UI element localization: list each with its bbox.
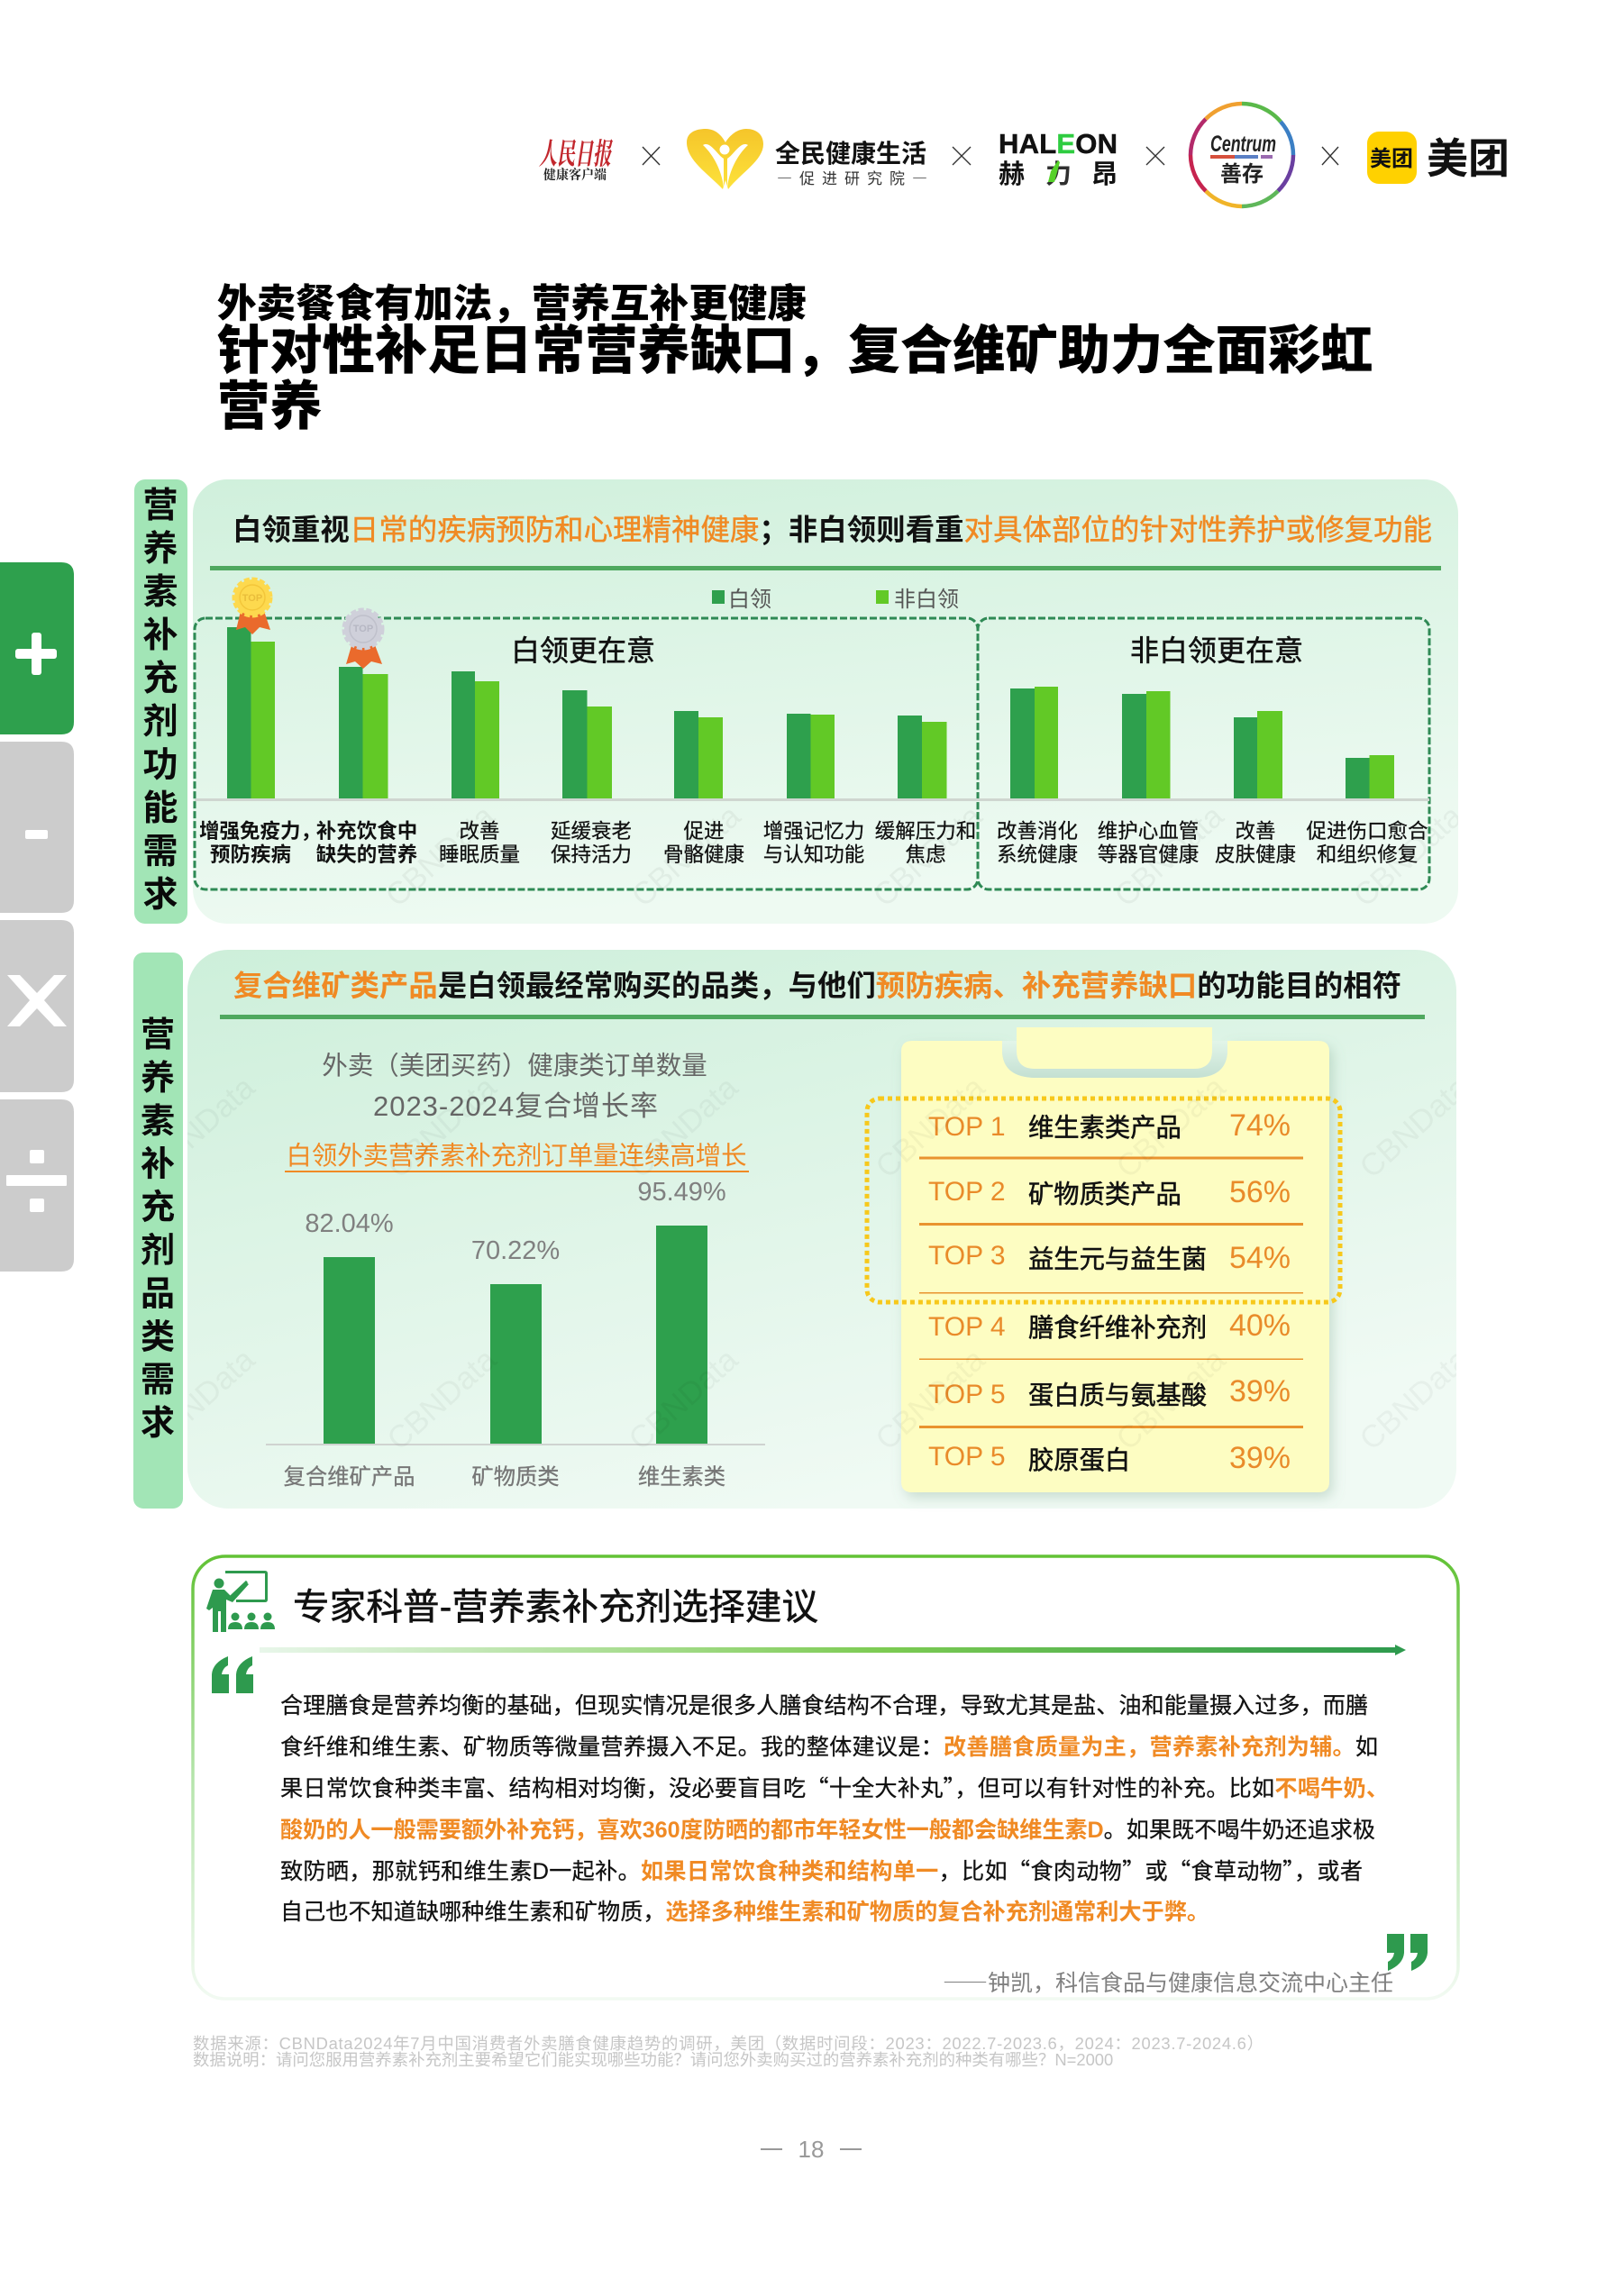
panel: function demand — [193, 479, 1470, 924]
category labels: 改善 — [1235, 816, 1276, 844]
side label: 营养素补充剂品类需求: 补 — [141, 1136, 175, 1186]
category labels: 保持活力 — [551, 839, 632, 868]
category labels: 骨骼健康 — [663, 839, 744, 868]
category labels: 增强记忆力 — [763, 816, 864, 844]
side label: 营养素补充剂功能需求: 能 — [142, 780, 178, 831]
side label: 营养素补充剂品类需求: 类 — [141, 1308, 175, 1358]
row: TOP 5 protein: 蛋白质与氨基酸 — [1028, 1375, 1207, 1412]
chart title: 2023-2024复合增长率 — [373, 1090, 658, 1122]
watermarks: CBNData — [1109, 1070, 1233, 1185]
chart title — [322, 1045, 707, 1122]
logo: HALEON 赫力昂 — [999, 128, 1118, 191]
category labels: 促进 — [683, 816, 725, 844]
logo: HALEON 赫力昂: 力 — [1045, 153, 1072, 191]
row: TOP 5 protein — [928, 1374, 1291, 1412]
logo: 美团: 美团 — [1370, 141, 1413, 172]
side label: 营养素补充剂功能需求: 补 — [142, 607, 178, 658]
row: TOP 5 protein: TOP 5 — [928, 1380, 1006, 1409]
watermarks: CBNData — [1346, 798, 1470, 914]
category labels — [199, 816, 1428, 868]
category labels: 缓解压力和 — [875, 816, 976, 844]
page number: 18 — [798, 2136, 824, 2163]
side label: 营养素补充剂功能需求: 需 — [142, 824, 178, 874]
logo: Centrum 善存: 善存 — [1220, 156, 1264, 187]
logo: HALEON 赫力昂: 昂 — [1091, 153, 1118, 191]
row: TOP 2: 56% — [1229, 1175, 1291, 1209]
category labels: 维护心血管 — [1098, 816, 1199, 844]
bar chart: growth rate — [266, 1178, 765, 1491]
quote body: 酸奶的人一般需要额外补充钙，喜欢360度防晒的都市年轻女性一般都会缺维生素D。如果既不喝牛奶还追求极 — [280, 1818, 1375, 1843]
row: TOP 1: 维生素类产品 — [1028, 1108, 1182, 1144]
tab: minus — [0, 742, 74, 913]
category labels: 与认知功能 — [763, 839, 864, 868]
side label: 营养素补充剂品类需求: 需 — [141, 1352, 175, 1401]
panel: expert advice — [193, 1556, 1458, 1999]
side label: 营养素补充剂品类需求: 充 — [141, 1180, 175, 1229]
watermarks: CBNData — [1353, 1342, 1476, 1457]
icon: opening quote — [212, 1656, 253, 1693]
source note: 数据来源：CBNData2024年7月中国消费者外卖膳食健康趋势的调研，美团（数据时间段：2023：2022.7-2023.6，2024：2023.7-2024.6） — [193, 2034, 1264, 2053]
bar chart: growth rate: 70.22% — [471, 1236, 560, 1265]
title: 营养 — [217, 363, 323, 440]
quote body: 致防晒，那就钙和维生素D一起补。如果日常饮食种类和结构单一，比如“食肉动物”或“食草动物”，或者 — [280, 1854, 1363, 1886]
side label: 营养素补充剂品类需求: 营 — [141, 1007, 175, 1056]
tab: divide — [0, 1099, 74, 1272]
logo: HALEON 赫力昂: HALEON — [999, 128, 1118, 160]
group frame: 非白领更在意 — [978, 618, 1429, 889]
row: TOP 5 collagen: TOP 5 — [928, 1442, 1006, 1472]
tab: times — [0, 920, 74, 1092]
icon: times separator — [953, 147, 971, 165]
category labels: 缺失的营养 — [316, 839, 417, 868]
source note: 数据说明：请问您服用营养素补充剂主要希望它们能实现哪些功能？请问您外卖购买过的营养素补充剂的种类有哪些？N=2000 — [193, 2050, 1113, 2069]
source note — [193, 2034, 1264, 2069]
group heading: 非白领更在意: 非白领更在意 — [1130, 628, 1303, 670]
watermarks: CBNData — [869, 1070, 992, 1185]
icon: times separator — [643, 147, 660, 165]
chart subtitle: 白领外卖营养素补充剂订单量连续高增长 — [286, 1135, 747, 1172]
watermarks — [187, 1081, 1456, 1447]
logo: HALEON 赫力昂: 赫 — [999, 153, 1025, 191]
row: TOP 4 — [928, 1308, 1291, 1345]
legend: 非白领 — [894, 581, 959, 613]
row: TOP 3 — [928, 1239, 1291, 1276]
quote body — [280, 1693, 1389, 1925]
watermarks — [388, 811, 1458, 903]
category labels: 补充饮食中 — [316, 816, 417, 844]
row: TOP 2: TOP 2 — [928, 1177, 1006, 1207]
category labels: 预防疾病 — [210, 839, 291, 868]
quote body: 自己也不知道缺哪种维生素和矿物质，选择多种维生素和矿物质的复合补充剂通常利大于弊。 — [280, 1900, 1209, 1925]
logo: 人民日报健康客户端 — [539, 131, 613, 184]
category labels: 焦虑 — [905, 839, 946, 868]
logo: 人民日报健康客户端: 人民日报 — [539, 131, 613, 173]
watermarks: CBNData — [866, 798, 990, 914]
icon: silver medal: TOP — [353, 624, 373, 634]
side label: 营养素补充剂功能需求: 剂 — [142, 694, 178, 744]
side label: 营养素补充剂功能需求: 养 — [142, 521, 178, 571]
watermarks: CBNData — [139, 1070, 262, 1185]
watermarks: CBNData — [625, 798, 748, 914]
side label: 营养素补充剂品类需求: 素 — [141, 1093, 175, 1143]
logo: 全民健康生活促进研究院: —促进研究院— — [777, 166, 927, 188]
logo: 全民健康生活促进研究院 — [687, 129, 927, 189]
bar chart: function demand — [195, 627, 1429, 801]
watermarks: CBNData — [869, 1342, 992, 1457]
group frame: 白领更在意 — [195, 618, 978, 889]
logo: 美团: 美团 — [1427, 126, 1510, 186]
panel heading: 白领重视日常的疾病预防和心理精神健康；非白领则看重对具体部位的针对性养护或修复功能 — [233, 506, 1432, 549]
watermarks: CBNData — [380, 1070, 504, 1185]
row: TOP 2 — [928, 1174, 1291, 1211]
category labels: 系统健康 — [997, 839, 1078, 868]
side label: 营养素补充剂功能需求 — [134, 478, 187, 924]
row: TOP 5 protein: 39% — [1229, 1374, 1291, 1408]
box heading: 专家科普-营养素补充剂选择建议 — [293, 1586, 818, 1627]
heading underline — [210, 566, 1441, 570]
title: 针对性补足日常营养缺口，复合维矿助力全面彩虹 — [217, 307, 1373, 384]
row: TOP 1: TOP 1 — [928, 1112, 1006, 1142]
row: TOP 1: 74% — [1229, 1108, 1291, 1143]
row: TOP 3: TOP 3 — [928, 1241, 1006, 1271]
heading underline — [220, 1015, 1425, 1019]
watermarks: CBNData — [1108, 798, 1231, 914]
title — [217, 271, 1373, 440]
logo: 全民健康生活促进研究院: 全民健康生活 — [775, 134, 926, 170]
arrow — [260, 1645, 1406, 1655]
chart title: 外卖（美团买药）健康类订单数量 — [322, 1045, 707, 1082]
row: TOP 5 collagen: 胶原蛋白 — [1028, 1440, 1130, 1477]
watermarks: CBNData — [380, 1342, 504, 1457]
icon: times separator — [1322, 147, 1338, 165]
icon: teacher and audience — [206, 1571, 275, 1632]
row: TOP 4: TOP 4 — [928, 1312, 1006, 1342]
logo: Centrum 善存: Centrum — [1210, 132, 1276, 157]
watermarks: CBNData — [622, 1070, 745, 1185]
category labels: 改善 — [459, 816, 500, 844]
row: TOP 2: 矿物质类产品 — [1028, 1174, 1182, 1211]
category labels: 增强免疫力， — [199, 816, 321, 844]
side label: 营养素补充剂功能需求: 充 — [142, 651, 178, 701]
side label: 营养素补充剂功能需求: 功 — [142, 737, 178, 788]
page number — [761, 2136, 862, 2163]
side label: 营养素补充剂功能需求: 营 — [142, 478, 178, 528]
quote body: 食纤维和维生素、矿物质等微量营养摄入不足。我的整体建议是：改善膳食质量为主，营养素补充剂为辅。如 — [280, 1734, 1378, 1760]
watermarks: CBNData — [379, 798, 502, 914]
side label: 营养素补充剂功能需求: 求 — [142, 867, 178, 917]
panel heading: 复合维矿类产品是白领最经常购买的品类，与他们预防疾病、补充营养缺口的功能目的相符 — [233, 963, 1401, 1005]
category labels: 改善消化 — [997, 816, 1078, 844]
legend: 白领 — [728, 581, 771, 613]
category labels: 皮肤健康 — [1215, 839, 1296, 868]
row: TOP 1 — [928, 1108, 1291, 1144]
watermarks: CBNData — [1353, 1070, 1476, 1185]
category labels: 睡眠质量 — [439, 839, 520, 868]
highlight: top three dotted frame — [867, 1099, 1340, 1302]
side label: 营养素补充剂品类需求: 品 — [141, 1265, 175, 1315]
side label: 营养素补充剂品类需求: 求 — [141, 1395, 175, 1445]
icon: gold medal — [234, 579, 270, 634]
bar chart: growth rate: 95.49% — [637, 1178, 726, 1207]
quote body: 果日常饮食种类丰富、结构相对均衡，没必要盲目吃“十全大补丸”，但可以有针对性的补充。比如不喝牛奶、 — [280, 1771, 1389, 1803]
bar chart: growth rate: 82.04% — [305, 1209, 394, 1238]
panel: category demand — [139, 950, 1476, 1509]
row: TOP 5 collagen — [928, 1440, 1291, 1477]
quote body: 合理膳食是营养均衡的基础，但现实情况是很多人膳食结构不合理，导致尤其是盐、油和能量摄入过多，而膳 — [280, 1693, 1368, 1718]
category labels: 等器官健康 — [1098, 839, 1199, 868]
legend — [712, 581, 959, 613]
row: TOP 3: 益生元与益生菌 — [1028, 1239, 1207, 1276]
title: 外卖餐食有加法，营养互补更健康 — [217, 271, 807, 329]
category labels: 和组织修复 — [1317, 839, 1418, 868]
watermarks: CBNData — [139, 1342, 262, 1457]
row: TOP 5 collagen: 39% — [1229, 1441, 1291, 1475]
side label: 营养素补充剂品类需求 — [133, 953, 183, 1509]
group heading: 白领更在意: 白领更在意 — [511, 628, 655, 670]
icon: gold medal: TOP — [242, 593, 262, 604]
side label: 营养素补充剂品类需求: 剂 — [141, 1222, 175, 1272]
bar chart: growth rate: 复合维矿产品 — [284, 1459, 415, 1491]
icon: times separator — [1146, 147, 1164, 165]
category labels: 延缓衰老 — [551, 816, 632, 844]
row: TOP 4: 膳食纤维补充剂 — [1028, 1308, 1207, 1345]
row: TOP 3: 54% — [1229, 1241, 1291, 1275]
tab: plus — [0, 562, 74, 734]
icon: closing quote — [1387, 1934, 1428, 1971]
attribution: ——钟凯，科信食品与健康信息交流中心主任 — [943, 1965, 1393, 1998]
side label: 营养素补充剂功能需求: 素 — [142, 564, 178, 615]
clipboard: top categories — [901, 1027, 1329, 1492]
side label: 营养素补充剂品类需求: 养 — [141, 1050, 175, 1099]
watermarks: CBNData — [622, 1342, 745, 1457]
logo: 美团 — [1367, 126, 1510, 186]
logo: 人民日报健康客户端: 健康客户端 — [543, 165, 607, 184]
bar chart: growth rate: 矿物质类 — [471, 1459, 560, 1491]
watermarks: CBNData — [1109, 1342, 1233, 1457]
row: TOP 4: 40% — [1229, 1308, 1291, 1343]
bar chart: growth rate: 维生素类 — [638, 1459, 725, 1491]
logo: Centrum 善存 — [1191, 104, 1293, 206]
icon: silver medal — [344, 610, 382, 669]
category labels: 促进伤口愈合 — [1306, 816, 1428, 844]
